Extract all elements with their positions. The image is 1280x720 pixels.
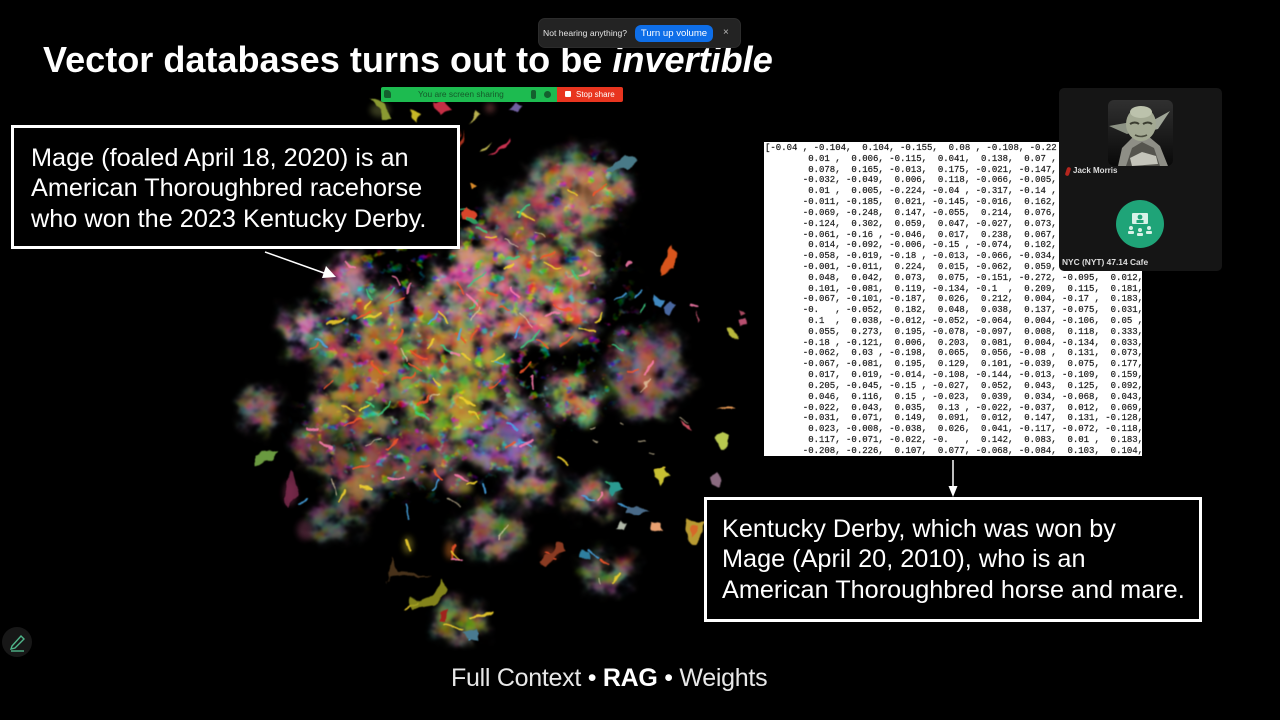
button: turn up volume — [635, 25, 713, 42]
notification toast: not hearing anything — [538, 18, 741, 48]
orange-red streaks — [310, 185, 638, 564]
callout: original text: Mage (foaled April 18, 2020) is an — [31, 144, 409, 172]
participants panel — [1059, 88, 1222, 271]
icon: pencil annotate button — [2, 627, 32, 657]
name: Jack Morris: Jack Morris — [1073, 166, 1117, 175]
callout: reconstructed text: Kentucky Derby, which was won by — [722, 515, 1116, 543]
room name: NYC (NYT) 47.14 Cafe — [1062, 257, 1148, 267]
mute icon — [1065, 167, 1071, 176]
arrow: matrix to reconstructed text — [948, 460, 958, 497]
red stop share button — [557, 87, 623, 102]
arrow: callout to cloud — [264, 251, 336, 278]
pink streaks — [305, 261, 698, 560]
blue streaks — [300, 290, 640, 640]
dark gaps between clusters — [300, 228, 645, 525]
green sharing status — [381, 87, 557, 102]
toast close icon: × — [723, 27, 729, 38]
screen sharing bar — [381, 87, 623, 102]
callout: original text: American Thoroughbred racehorse — [31, 174, 422, 202]
callout: reconstructed text: Mage (April 20, 2010), who is an — [722, 545, 1086, 573]
callout: original text — [11, 125, 460, 249]
callout: original text: who won the 2023 Kentucky Derby. — [31, 205, 426, 233]
button: turn up volume: Turn up volume — [641, 28, 707, 39]
pale highlights — [332, 232, 688, 584]
outlying fragments — [255, 98, 747, 640]
icon: meeting room — [1116, 200, 1164, 248]
vector number matrix: [-0.04 , -0.104, 0.104, -0.155, 0.08 , -0.108, -0.22 0.01 , 0.006, -0.115, 0.041, 0.138, 0.07 , 0.078, 0.165, -0.013, 0.175, -0.021, -0.147, -0.032, -0.049, 0.006, 0.118, -0.066, -0.005, 0.01 , 0.005, -0.224, -0.04 , -0.317, -0.14 , -0.011, -0.185, 0.021, -0.145, -0.016, 0.162, -0.069, -0.248, 0.147, -0.055, 0.214, 0.076, -0.124, 0.302, 0.059, 0.047, -0.027, 0.073, -0.061, -0.16 , -0.046, 0.017, 0.238, 0.067, 0.014, -0.092, -0.006, -0.15 , -0.074, 0.102, -0.058, -0.019, -0.18 , -0.013, -0.066, -0.034, -0.001, -0.011, 0.224, 0.015, -0.062, 0.059, 0.048, 0.042, 0.073, 0.075, -0.151, -0.272, -0.095, 0.012, 0.101, -0.081, 0.119, -0.134, -0.1 , 0.209, 0.115, 0.181, -0.067, -0.101, -0.187, 0.026, 0.212, 0.004, -0.17 , 0.183, -0. , -0.052, 0.182, 0.048, 0.038, 0.137, -0.075, 0.031, 0.1 , 0.038, -0.012, -0.052, -0.064, 0.004, -0.106, 0.05 , 0.055, 0.273, 0.195, -0.078, -0.097, 0.008, 0.118, 0.333, -0.18 , -0.121, 0.006, 0.203, 0.081, 0.004, -0.134, 0.033, -0.062, 0.03 , -0.198, 0.065, 0.056, -0.08 , 0.131, 0.073, -0.067, -0.081, 0.195, 0.129, 0.101, -0.039, 0.075, 0.177, 0.017, 0.019, -0.014, -0.108, -0.144, -0.013, -0.109, 0.159, 0.205, -0.045, -0.15 , -0.027, 0.052, 0.043, 0.125, 0.092, 0.046, 0.116, 0.15 , -0.023, 0.039, 0.034, -0.068, 0.043, -0.022, 0.043, 0.035, 0.13 , -0.022, -0.037, 0.012, 0.069, -0.031, 0.071, 0.149, 0.091, 0.012, 0.147, 0.131, -0.128, 0.023, -0.008, -0.038, 0.026, 0.041, -0.117, -0.072, -0.118, 0.117, -0.071, -0.022, -0. , 0.142, 0.083, 0.01 , 0.183, -0.208, -0.226, 0.107, 0.077, -0.068, -0.084, 0.103, 0.104, — [765, 143, 1142, 456]
callout: reconstructed text: American Thoroughbred horse and mare. — [722, 576, 1185, 604]
toast message: Not hearing anything? — [543, 28, 627, 38]
yellow streaks — [325, 190, 663, 629]
green sharing status: You are screen sharing — [418, 89, 504, 99]
mid-sharp cluster highlights — [268, 103, 655, 559]
red stop share button: Stop share — [576, 90, 615, 99]
soft colour blobs of the main cloud — [246, 152, 681, 638]
rainbow fleck texture — [300, 155, 640, 490]
callout: reconstructed text — [704, 497, 1202, 622]
footer navigation: full context, RAG, weights: Full Context • RAG • Weights — [451, 664, 767, 692]
green streaks — [365, 205, 646, 485]
title: Vector databases turns out to be invertible — [43, 39, 773, 80]
avatar: Yoda — [1108, 100, 1173, 166]
